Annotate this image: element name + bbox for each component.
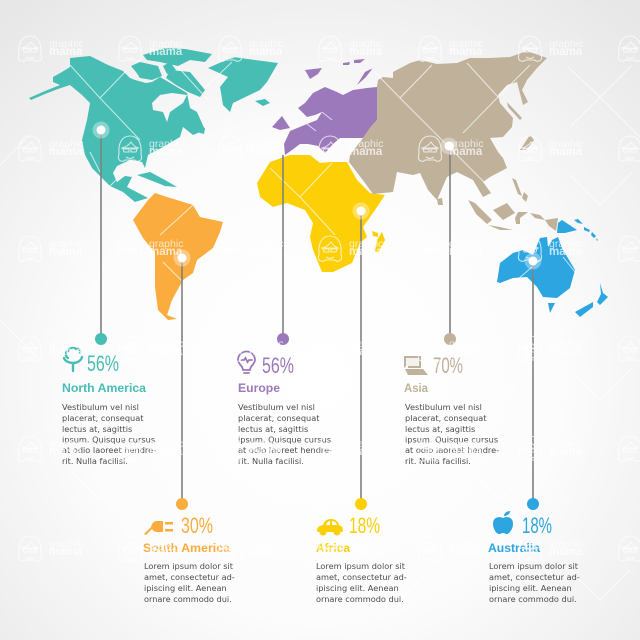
heading: Africa <box>316 543 351 555</box>
text block: ipsum. Quisque cursus <box>62 434 155 444</box>
text block: at odio laoreet hendre- <box>238 445 332 455</box>
percentage: 18% <box>349 513 380 538</box>
continent: Asia <box>349 51 558 231</box>
percentage: 18% <box>522 513 552 538</box>
text block: Lorem ipsum dolor sit <box>489 561 579 571</box>
panel: North America <box>62 348 156 466</box>
percentage: 30% <box>181 513 213 538</box>
percentage: 70% <box>433 353 463 378</box>
text block: Vestibulum vel nisl <box>62 402 139 412</box>
text block: ipiscing elit. Aenean <box>489 583 572 593</box>
icon: car <box>317 519 343 536</box>
continent: South America <box>133 193 223 320</box>
world map <box>29 48 608 320</box>
text block: ornare commodo dui. <box>144 594 232 604</box>
continent: North America <box>29 48 278 202</box>
watermark grid <box>18 36 640 561</box>
panel: Europe <box>238 352 332 466</box>
text block: lectus at, sagittis <box>62 424 132 434</box>
panel: South America <box>143 513 235 604</box>
pin line and marker: Australia <box>524 252 542 510</box>
text block: amet, consectetur ad- <box>489 572 580 582</box>
text block: ipiscing elit. Aenean <box>316 583 399 593</box>
text block: placerat, consequat <box>405 413 487 423</box>
continent: Australia and Oceania <box>497 219 608 317</box>
pin line and marker: Europe <box>277 155 289 345</box>
text block: Lorem ipsum dolor sit <box>316 561 406 571</box>
continent: Europe <box>272 59 377 155</box>
heading: Australia <box>488 543 541 555</box>
text block: rit. Nulla facilisi. <box>62 456 128 466</box>
text block: Vestibulum vel nisl <box>238 402 315 412</box>
text block: rit. Nulla facilisi. <box>405 456 471 466</box>
pin line and marker: North America <box>92 122 110 345</box>
text block: Vestibulum vel nisl <box>405 402 482 412</box>
heading: Asia <box>404 383 429 395</box>
text block <box>62 402 156 466</box>
icon: light bulb <box>238 352 255 373</box>
text block: placerat, consequat <box>238 413 320 423</box>
text block: ornare commodo dui. <box>316 594 404 604</box>
text block <box>144 561 235 604</box>
icon: plug <box>144 521 173 535</box>
panel: Africa <box>316 513 407 604</box>
text block <box>316 561 407 604</box>
icon: tree <box>64 348 82 371</box>
text block: at odio laoreet hendre- <box>62 445 156 455</box>
text block: lectus at, sagittis <box>405 424 475 434</box>
icon: laptop <box>404 356 428 375</box>
pin line and marker: Asia <box>440 138 458 345</box>
text block: ipsum. Quisque cursus <box>405 434 498 444</box>
text block <box>238 402 332 466</box>
text block <box>489 561 580 604</box>
percentage: 56% <box>87 351 119 376</box>
text block <box>405 402 499 466</box>
text block: rit. Nulla facilisi. <box>238 456 304 466</box>
text block: amet, consectetur ad- <box>144 572 235 582</box>
text block: lectus at, sagittis <box>238 424 308 434</box>
continent: Africa <box>257 155 385 272</box>
pin line and marker: South America <box>174 250 190 510</box>
text block: ipsum. Quisque cursus <box>238 434 331 444</box>
text block: ipiscing elit. Aenean <box>144 583 227 593</box>
heading: North America <box>62 383 147 395</box>
text block: Lorem ipsum dolor sit <box>144 561 234 571</box>
panel: Asia <box>404 353 499 466</box>
heading: Europe <box>238 383 280 395</box>
pin line and marker: Africa <box>352 202 370 510</box>
heading: South America <box>143 543 231 555</box>
text block: placerat, consequat <box>62 413 144 423</box>
panel: Australia <box>488 511 580 604</box>
text block: amet, consectetur ad- <box>316 572 407 582</box>
text block: ornare commodo dui. <box>489 594 577 604</box>
icon: apple <box>493 511 513 534</box>
percentage: 56% <box>262 353 294 378</box>
text block: at odio laoreet hendre- <box>405 445 499 455</box>
